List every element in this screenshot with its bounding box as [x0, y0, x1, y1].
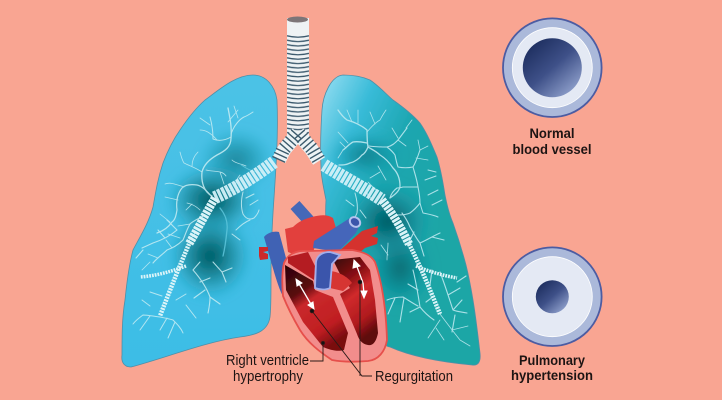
left lung: [122, 75, 277, 367]
heart wall: [282, 250, 387, 362]
septal tissue: [329, 271, 352, 291]
label: normal blood vessel: blood vessel: [512, 141, 592, 157]
pulmonary vein stub: [259, 247, 268, 260]
heart: [259, 205, 387, 362]
icon: normal blood vessel cross-section: [503, 18, 602, 117]
infographic: [121, 16, 602, 384]
trachea: [287, 16, 309, 138]
superior vena cava: [295, 205, 312, 224]
right ventricle: [285, 265, 348, 351]
right atrium: [288, 252, 315, 280]
label: hypertrophy line: hypertrophy: [233, 368, 303, 385]
label: normal blood vessel: [512, 125, 592, 157]
main bronchi: [278, 133, 320, 162]
vena cava left: [264, 232, 286, 298]
lungs and airways: [122, 16, 480, 367]
label: pulmonary hypertension: Pulmonary: [519, 352, 585, 368]
aorta: [285, 215, 336, 254]
right lung: [321, 75, 480, 365]
label: regurgitation: Regurgitation: [375, 368, 453, 385]
regurgitation arrows: [296, 260, 367, 309]
right pulmonary veins: [338, 226, 378, 254]
left atrium and ventricle: [333, 257, 378, 345]
pulmonary artery: [313, 218, 360, 252]
right bronchus: [324, 165, 457, 314]
icon: pulmonary hypertension vessel cross-section: [503, 247, 602, 346]
label: normal blood vessel: Normal: [530, 125, 574, 141]
right bronchial tree: [338, 110, 470, 346]
label: pulmonary hypertension: hypertension: [511, 367, 593, 383]
label: right ventricle hypertrophy: Right ventricle: [226, 352, 309, 369]
left bronchial tree: [133, 106, 263, 338]
label: pulmonary hypertension: [511, 352, 593, 383]
left bronchus: [140, 162, 274, 316]
leader lines: [310, 280, 372, 376]
aortic root: [315, 252, 340, 290]
